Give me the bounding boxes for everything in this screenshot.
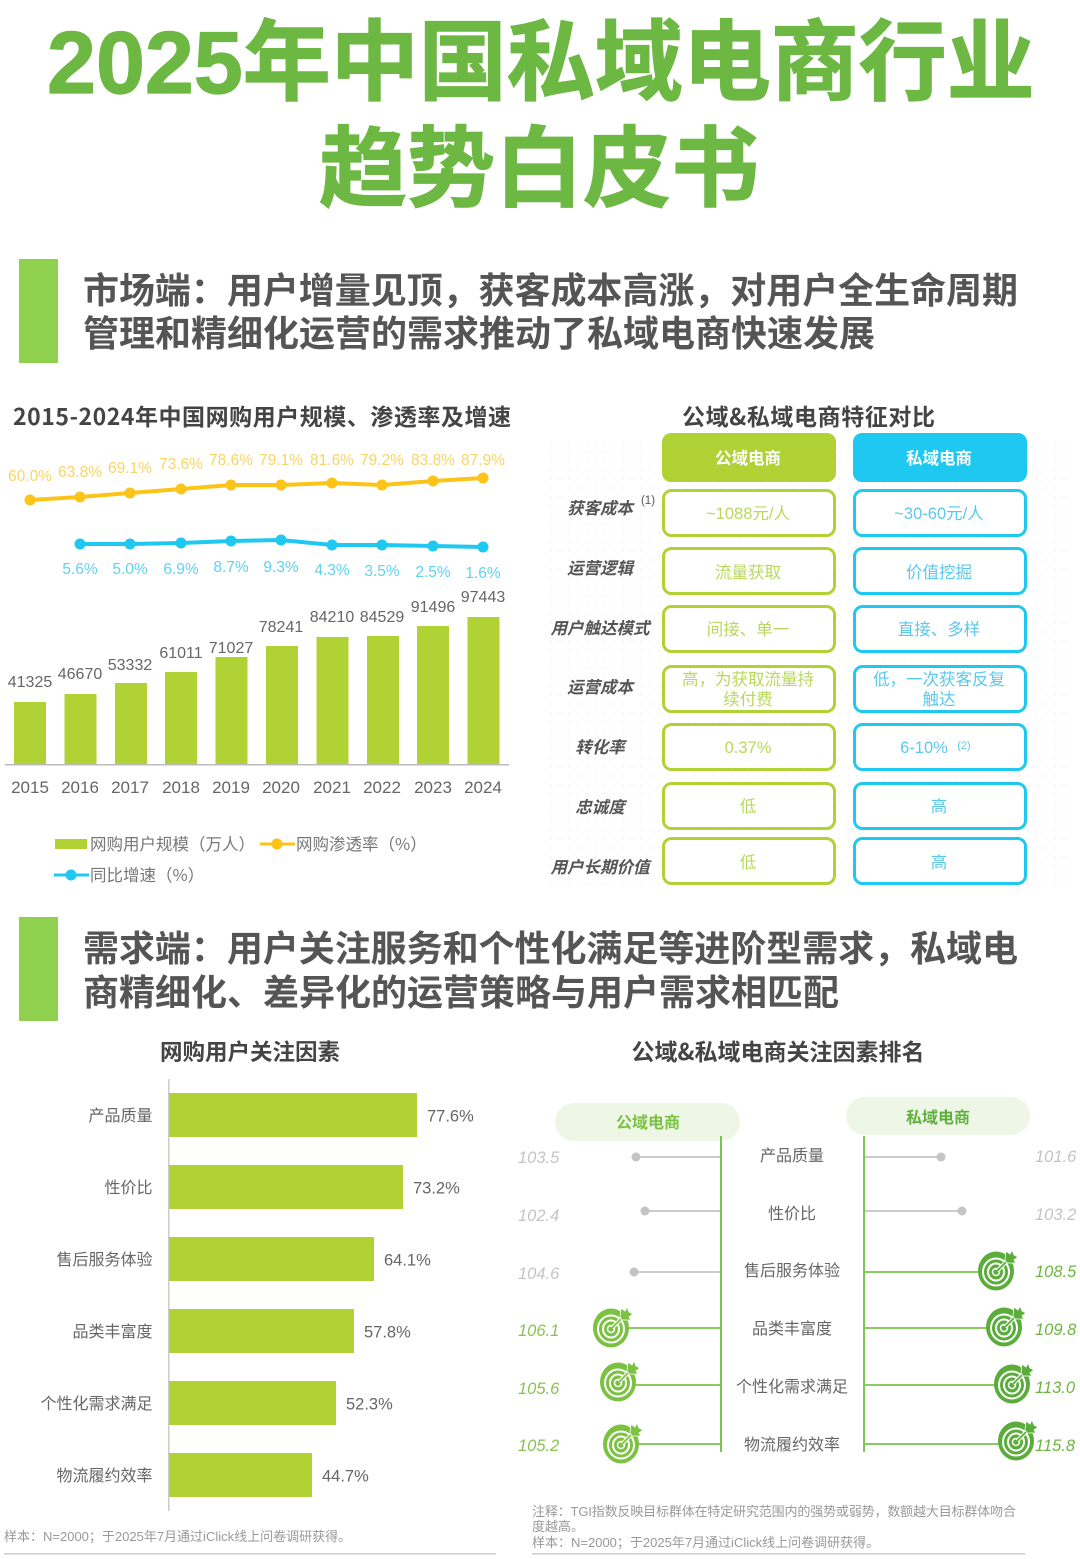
public values: 103.5	[518, 1149, 560, 1167]
year axis labels: 2015	[11, 778, 49, 797]
YoY growth line	[62, 534, 501, 582]
section heading: market side: 管理和精细化运营的需求推动了私域电商快速发展	[83, 305, 875, 357]
factor labels: 性价比	[104, 1179, 152, 1197]
row labels: 用户长期价值	[550, 858, 652, 877]
private column text: 直接、多样	[898, 620, 980, 639]
notes right: 样本：N=2000；于2025年7月通过iClick线上问卷调研获得。	[532, 1535, 879, 1551]
column headers: 私域电商	[906, 445, 972, 469]
sample note left: 样本：N=2000；于2025年7月通过iClick线上问卷调研获得。	[4, 1529, 351, 1545]
user scale bars	[14, 617, 500, 764]
YoY growth line: 5.0%	[112, 561, 148, 578]
public column text: 间接、单一	[707, 620, 789, 639]
table title: 公域&私域电商特征对比	[682, 398, 935, 432]
bar value labels	[8, 589, 505, 691]
factor labels: 产品质量	[88, 1107, 152, 1125]
year axis labels: 2020	[262, 778, 300, 797]
section heading: market side: 市场端：用户增量见顶，获客成本高涨，对用户全生命周期	[83, 262, 1018, 314]
chart title: 公域&私域电商关注因素排名	[631, 1033, 925, 1067]
bar value labels: 53332	[108, 657, 152, 674]
percentage values: 57.8%	[364, 1324, 411, 1342]
ranking chart: public vs private TGI	[518, 1033, 1077, 1464]
section heading: demand side: 需求端：用户关注服务和个性化满足等进阶型需求，私域电	[83, 920, 1018, 972]
bar value labels: 78241	[259, 619, 303, 636]
private column text: 低，一次获客反复	[873, 670, 1005, 689]
private column text: ~30-60元/人	[894, 504, 984, 523]
penetration rate line: 87.9%	[461, 452, 505, 469]
row labels: 获客成本	[567, 499, 636, 518]
penetration rate line: 79.2%	[360, 452, 404, 469]
year axis labels	[11, 778, 502, 797]
bar value labels: 71027	[209, 640, 253, 657]
year axis labels: 2021	[313, 778, 351, 797]
bar chart: user concern factors	[40, 1035, 474, 1511]
public column text	[682, 504, 814, 872]
factor labels: 物流履约效率	[744, 1436, 840, 1454]
percentage values: 52.3%	[346, 1396, 393, 1414]
penetration rate line: 60.0%	[8, 468, 52, 485]
penetration rate line: 79.1%	[259, 452, 303, 469]
pill: private	[846, 1097, 1030, 1135]
factor labels: 品类丰富度	[752, 1320, 832, 1338]
penetration rate line: 63.8%	[58, 464, 102, 481]
chart title: 2015-2024年中国网购用户规模、渗透率及增速	[13, 398, 511, 432]
private values: 113.0	[1035, 1379, 1076, 1397]
factor labels: 售后服务体验	[56, 1251, 152, 1269]
factor labels: 产品质量	[760, 1147, 824, 1165]
bar value labels: 61011	[159, 645, 203, 662]
public column text: 0.37%	[725, 739, 772, 757]
factor labels: 个性化需求满足	[736, 1378, 848, 1396]
public values: 105.2	[518, 1437, 559, 1455]
column headers: 公域电商	[715, 445, 781, 469]
public values	[518, 1149, 560, 1455]
year axis labels: 2022	[363, 778, 401, 797]
public values: 106.1	[518, 1322, 559, 1340]
factor labels: 售后服务体验	[744, 1262, 840, 1280]
YoY growth line: 8.7%	[213, 559, 249, 576]
bar value labels: 46670	[58, 666, 102, 683]
axes	[720, 1136, 865, 1452]
YoY growth line: 1.6%	[465, 565, 501, 582]
legend: 同比增速（%）	[90, 862, 204, 886]
green connectors	[620, 1272, 1005, 1444]
public values: 104.6	[518, 1265, 560, 1283]
factor labels: 性价比	[768, 1205, 816, 1223]
factor labels	[736, 1147, 848, 1454]
penetration rate line: 83.8%	[411, 452, 455, 469]
title: 2025年中国私域电商行业	[47, 13, 1035, 112]
percentage values: 44.7%	[322, 1468, 369, 1486]
year axis labels: 2017	[111, 778, 149, 797]
bar value labels: 84529	[360, 609, 404, 626]
YoY growth line: 6.9%	[163, 561, 199, 578]
percentage values: 77.6%	[427, 1108, 474, 1126]
row labels: 转化率	[575, 738, 627, 757]
bar value labels: 41325	[8, 674, 52, 691]
title: 趋势白皮书	[319, 120, 759, 218]
icon: public targets	[593, 1307, 643, 1464]
private column text: 高	[931, 853, 947, 872]
YoY growth line: 9.3%	[263, 559, 299, 576]
private column text	[873, 504, 1005, 872]
factor labels	[40, 1107, 152, 1485]
private column text: 高	[931, 797, 947, 816]
row labels	[550, 495, 655, 877]
public column text: 低	[740, 853, 756, 872]
factor labels: 物流履约效率	[56, 1467, 152, 1485]
percentage values: 73.2%	[413, 1180, 460, 1198]
section heading: demand side	[19, 917, 1018, 1021]
year axis labels: 2019	[212, 778, 250, 797]
YoY growth line: 3.5%	[364, 563, 400, 580]
factor labels: 品类丰富度	[72, 1323, 152, 1341]
bar value labels: 91496	[411, 599, 455, 616]
bar value labels: 97443	[461, 589, 505, 606]
title	[47, 13, 1035, 218]
public column text: 流量获取	[715, 563, 781, 582]
legend: 网购渗透率（%）	[296, 831, 427, 855]
public values: 105.6	[518, 1380, 560, 1398]
penetration rate line: 73.6%	[159, 456, 203, 473]
private values: 115.8	[1035, 1437, 1076, 1455]
row labels: 忠诚度	[575, 798, 627, 817]
year axis labels: 2024	[464, 778, 502, 797]
grey connectors	[634, 1157, 962, 1272]
row labels: 运营成本	[567, 678, 636, 697]
YoY growth line: 4.3%	[314, 562, 350, 579]
private column text: (2)	[957, 740, 971, 752]
private column text: 触达	[922, 690, 956, 709]
chart title: 网购用户关注因素	[160, 1035, 340, 1067]
YoY growth line: 5.6%	[62, 561, 98, 578]
notes right: 度越高。	[532, 1519, 584, 1534]
horizontal bars	[169, 1093, 417, 1497]
bar value labels: 84210	[310, 609, 354, 626]
row labels: 用户触达模式	[550, 619, 652, 638]
notes right: 注释：TGI指数反映目标群体在特定研究范围内的强势或弱势，数额越大目标群体吻合	[532, 1504, 1016, 1519]
private values: 103.2	[1035, 1206, 1076, 1224]
public column text: 低	[740, 797, 756, 816]
legend	[54, 831, 427, 886]
public column text: 续付费	[723, 690, 773, 709]
YoY growth line: 2.5%	[415, 564, 451, 581]
penetration rate line: 81.6%	[310, 452, 354, 469]
column headers	[662, 433, 1027, 482]
private values: 108.5	[1035, 1263, 1077, 1281]
year axis labels: 2018	[162, 778, 200, 797]
percentage values: 64.1%	[384, 1252, 431, 1270]
pill: public: 公域电商	[616, 1109, 680, 1133]
private column text: 价值挖掘	[906, 563, 972, 582]
private values	[1035, 1148, 1077, 1455]
private values: 101.6	[1035, 1148, 1077, 1166]
penetration rate line: 69.1%	[108, 460, 152, 477]
public column cells	[664, 490, 834, 884]
private values: 109.8	[1035, 1321, 1077, 1339]
private column text: 6-10%	[900, 739, 948, 757]
pill: private: 私域电商	[906, 1104, 970, 1128]
percentage values	[322, 1108, 474, 1486]
year axis labels: 2016	[61, 778, 99, 797]
notes right	[532, 1504, 1025, 1554]
chart: online shopping users 2015-2024	[5, 398, 511, 886]
legend: 网购用户规模（万人）	[90, 831, 255, 855]
section heading: market side	[19, 259, 1018, 363]
private column cells	[854, 490, 1026, 884]
pill: public	[555, 1103, 740, 1141]
year axis labels: 2023	[414, 778, 452, 797]
row labels: 运营逻辑	[567, 559, 636, 578]
section heading: demand side: 商精细化、差异化的运营策略与用户需求相匹配	[83, 964, 839, 1016]
comparison table: public vs private e-commerce	[550, 398, 1027, 884]
row labels: (1)	[641, 495, 655, 507]
penetration rate line: 78.6%	[209, 452, 253, 469]
public column text: ~1088元/人	[706, 504, 790, 523]
penetration rate line	[8, 452, 505, 506]
icon: private targets	[978, 1250, 1038, 1460]
public values: 102.4	[518, 1207, 559, 1225]
public column text: 高，为获取流量持	[682, 670, 814, 689]
factor labels: 个性化需求满足	[40, 1395, 152, 1413]
